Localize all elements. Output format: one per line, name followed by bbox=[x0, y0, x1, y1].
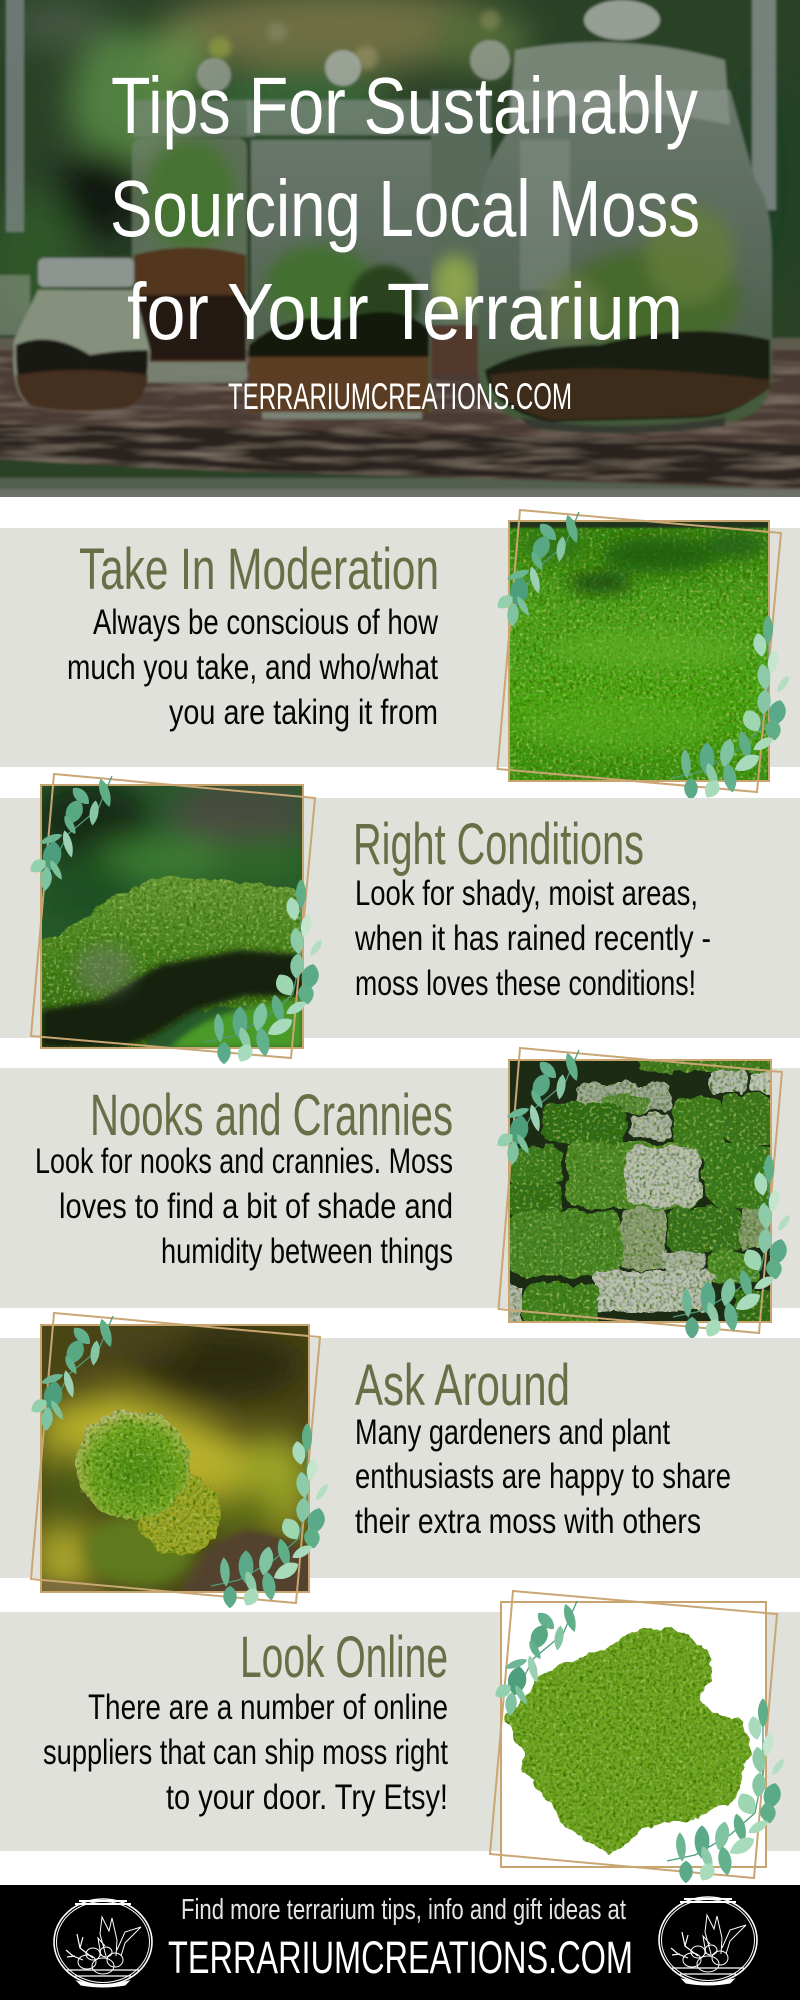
body text: to your door. Try Etsy! bbox=[166, 1778, 448, 1817]
body text bbox=[35, 1142, 453, 1271]
jar 3 bbox=[251, 140, 431, 418]
body text: Look for shady, moist areas, bbox=[355, 874, 698, 913]
tilted frame bbox=[498, 1048, 782, 1333]
title bbox=[110, 61, 700, 356]
photo: moss carpet bbox=[510, 522, 768, 780]
heading: Nooks and Crannies bbox=[90, 1083, 453, 1148]
icon: terrarium right bbox=[659, 1897, 757, 1985]
footer website: TERRARIUMCREATIONS.COM bbox=[168, 1932, 633, 1983]
body text bbox=[67, 603, 439, 732]
body text: moss loves these conditions! bbox=[355, 964, 696, 1003]
body text: Many gardeners and plant bbox=[355, 1413, 670, 1452]
panel: look online bbox=[0, 1591, 800, 1884]
body text: their extra moss with others bbox=[355, 1502, 701, 1541]
jar 1 bbox=[13, 290, 150, 411]
body text bbox=[43, 1688, 448, 1817]
heading: Right Conditions bbox=[353, 812, 644, 877]
tilted frame bbox=[31, 1313, 320, 1603]
leaves bbox=[494, 1050, 581, 1165]
photo: mossy stone wall bbox=[505, 1056, 775, 1326]
band bbox=[0, 798, 800, 1038]
hero photo: terrarium jars on a wooden table bbox=[0, 0, 800, 510]
band bbox=[0, 1338, 800, 1578]
jar 5 bbox=[478, 90, 772, 428]
body text: Look for nooks and crannies. Moss bbox=[35, 1142, 453, 1181]
panel: take in moderation bbox=[0, 510, 800, 801]
body text: you are taking it from bbox=[169, 693, 438, 732]
body text: when it has rained recently - bbox=[354, 919, 711, 958]
body text: much you take, and who/what bbox=[67, 648, 438, 687]
body text bbox=[354, 874, 711, 1003]
tilted frame bbox=[490, 1591, 777, 1878]
jar 4 bbox=[430, 88, 493, 326]
leaves bbox=[28, 1316, 115, 1431]
heading: Take In Moderation bbox=[79, 537, 439, 602]
body text bbox=[355, 1413, 731, 1541]
jar 2 bbox=[132, 138, 247, 383]
body text: loves to find a bit of shade and bbox=[59, 1187, 453, 1226]
heading: Look Online bbox=[240, 1625, 448, 1690]
photo: moss on a branch bbox=[42, 786, 302, 1047]
tilted frame bbox=[498, 510, 781, 792]
band bbox=[0, 1612, 800, 1851]
footer tagline: Find more terrarium tips, info and gift ideas at bbox=[181, 1894, 626, 1926]
body text: suppliers that can ship moss right bbox=[43, 1733, 448, 1772]
band bbox=[0, 528, 800, 767]
leaves bbox=[27, 776, 114, 891]
leaves bbox=[494, 512, 581, 627]
leaves bbox=[492, 1601, 579, 1716]
photo: moss clump bbox=[505, 1628, 752, 1855]
table bbox=[0, 476, 760, 490]
title: for Your Terrarium bbox=[127, 267, 683, 356]
icon: terrarium left bbox=[54, 1899, 152, 1987]
subtitle: website: TERRARIUMCREATIONS.COM bbox=[228, 376, 572, 417]
panel: nooks and crannies bbox=[0, 1048, 800, 1340]
footer bbox=[0, 1885, 800, 2000]
heading: Ask Around bbox=[355, 1353, 570, 1418]
band bbox=[0, 1068, 800, 1308]
photo: moss ball bbox=[31, 1325, 315, 1596]
white photo background bbox=[501, 1602, 766, 1867]
body text: humidity between things bbox=[161, 1232, 453, 1271]
body text: There are a number of online bbox=[88, 1688, 448, 1727]
tilted frame bbox=[31, 774, 315, 1058]
panel: ask around bbox=[0, 1313, 800, 1609]
panel: right conditions bbox=[0, 774, 800, 1065]
body text: Always be conscious of how bbox=[93, 603, 439, 642]
